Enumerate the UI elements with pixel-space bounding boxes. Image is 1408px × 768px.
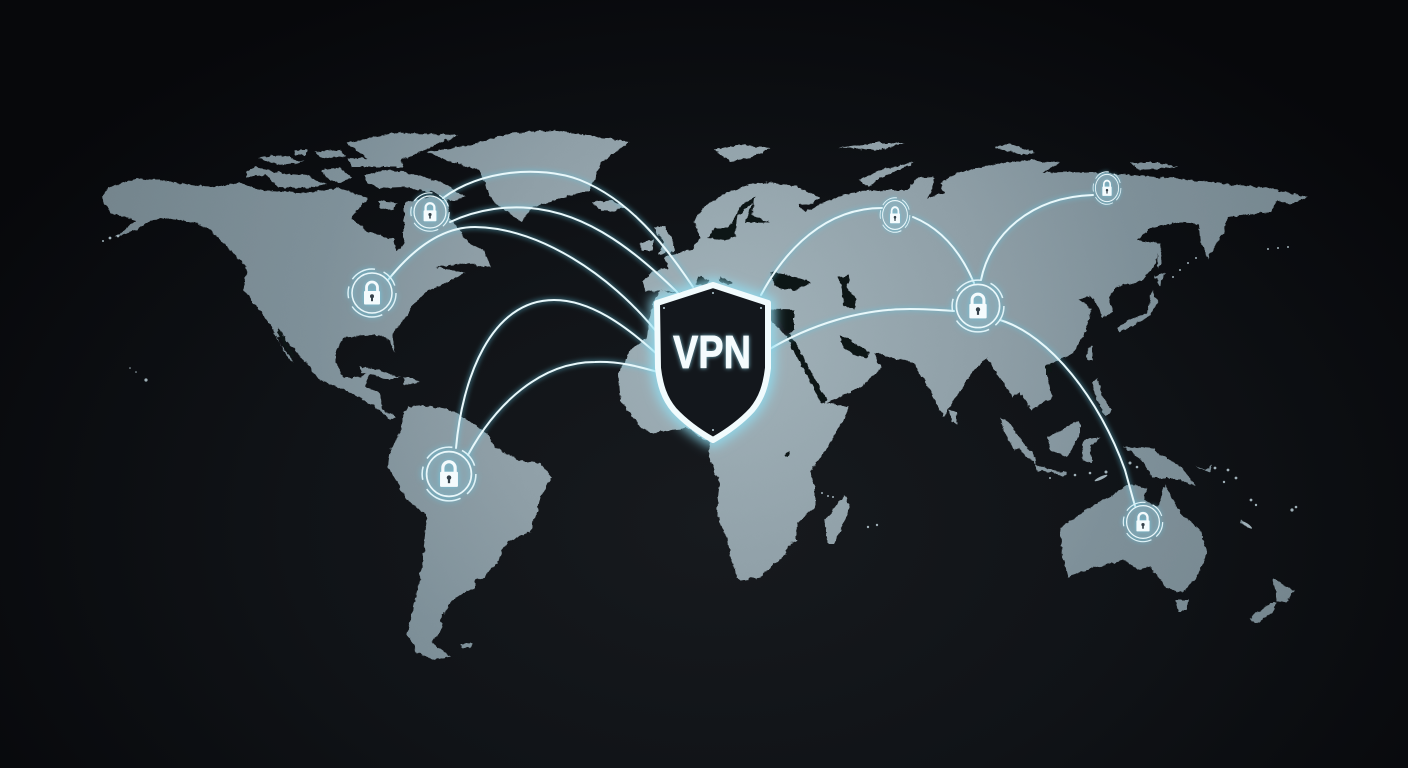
- shield glow: [657, 285, 768, 440]
- continent: Greenland: [427, 130, 629, 222]
- continent: North America: [101, 178, 492, 420]
- lock node: Canada: [411, 193, 449, 231]
- inland seas: [277, 196, 1052, 457]
- arc: USA to shield: [388, 227, 655, 330]
- continent: Australia: [1060, 485, 1207, 593]
- lock node: Australia: [1123, 502, 1163, 542]
- lock node: Siberia: [1093, 172, 1121, 204]
- lock node: USA: [348, 269, 396, 317]
- connection arcs: [388, 172, 1135, 506]
- arc: central Asia to Siberia: [981, 195, 1093, 280]
- continent: Africa: [618, 291, 850, 580]
- lock node: west Russia: [880, 198, 910, 232]
- continent: South America: [388, 405, 552, 660]
- arc: South America lower to shield: [468, 362, 658, 455]
- scattered tiny islands: [102, 235, 1297, 530]
- world map: [101, 130, 1308, 660]
- arc: Canada upper to shield: [443, 172, 693, 287]
- arc: central Asia to Australia: [1000, 320, 1135, 506]
- continent: Eurasia: [644, 160, 1308, 417]
- arc: west Russia to central Asia: [913, 217, 974, 283]
- VPN label: VPN: [673, 326, 751, 378]
- shield rivets: [663, 292, 762, 431]
- islands: [245, 133, 1295, 648]
- arc: shield to west Russia: [761, 208, 882, 295]
- lock node: central Asia: [952, 280, 1004, 332]
- lock node: South America: [422, 447, 476, 501]
- arc: Canada lower to shield: [450, 207, 682, 297]
- arc: shield to central Asia: [768, 309, 954, 350]
- shield outline: [657, 285, 768, 440]
- VPN shield: [657, 285, 768, 440]
- arc: South America upper to shield: [456, 300, 658, 448]
